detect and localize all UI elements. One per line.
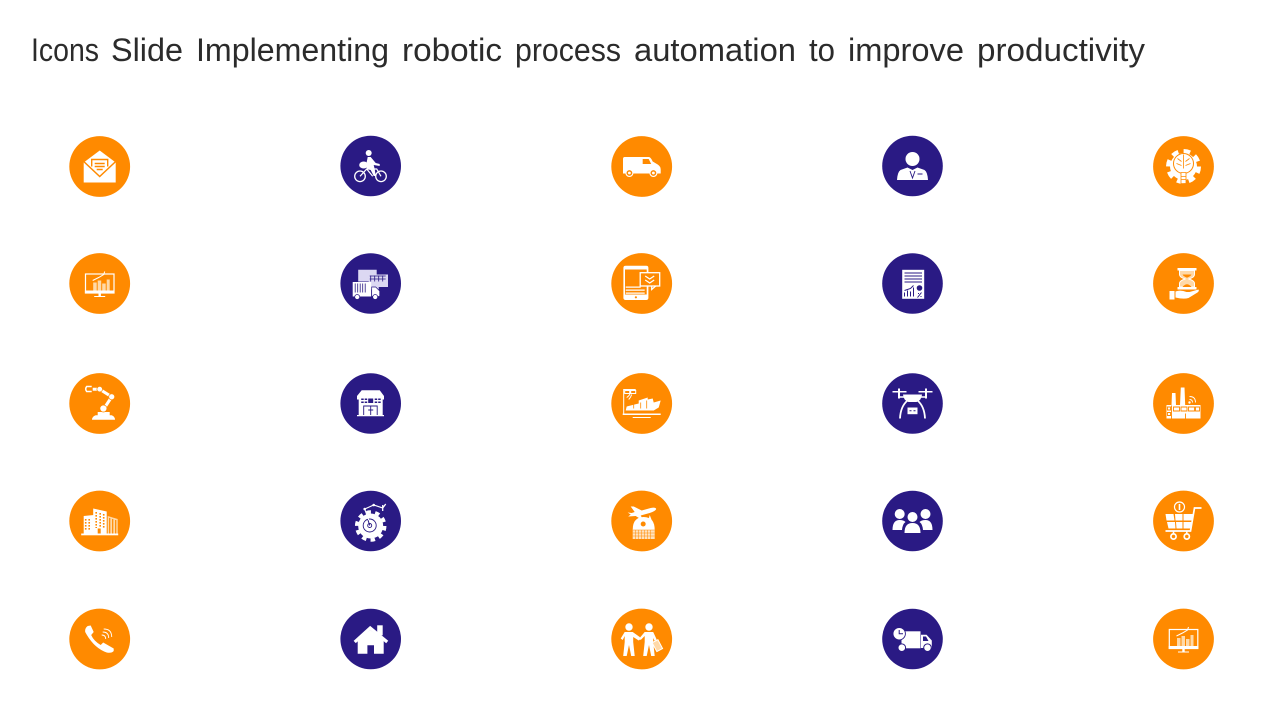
title: productivity <box>977 32 1145 68</box>
icon: group of people <box>882 491 943 551</box>
icon: house <box>340 609 401 669</box>
icon: tablet with download chat <box>611 253 672 314</box>
icon: staff person <box>882 136 943 196</box>
title: to <box>809 32 835 68</box>
icon: monitor with rising chart <box>69 253 130 314</box>
title: Slide <box>111 32 183 68</box>
title: Icons <box>31 32 99 68</box>
title: Implementing <box>196 32 389 68</box>
icon: report document <box>882 253 943 314</box>
icon: open envelope with letter <box>69 136 130 197</box>
icon: store building <box>340 373 401 434</box>
icon: smart factory <box>1153 373 1214 434</box>
icon grid <box>69 136 1214 669</box>
icon: hourglass in hand <box>1153 253 1214 314</box>
icon: gear with brain bulb <box>1153 136 1214 197</box>
icon: delivery van <box>611 136 672 197</box>
icon: truck and warehouses <box>340 253 401 314</box>
title: automation <box>634 32 796 68</box>
icon: delivery truck with clock <box>882 609 943 669</box>
icon: monitor with growth chart <box>1153 609 1214 669</box>
icon: office buildings <box>69 491 130 551</box>
title: robotic <box>402 32 502 68</box>
icon: airplane over dome <box>611 491 672 551</box>
icon: robotic arm <box>69 373 130 434</box>
title: process <box>515 32 621 68</box>
icon: shopping cart with coin <box>1153 491 1214 551</box>
icon: gear with robot arm <box>340 491 401 551</box>
icon: two people handshake with bag <box>611 609 672 669</box>
icon: delivery drone <box>882 373 943 434</box>
title: improve <box>848 32 964 68</box>
icon: telephone with signal <box>69 609 130 669</box>
icon: cargo ship on screen <box>611 373 672 434</box>
icon: cyclist with bag <box>340 136 401 196</box>
